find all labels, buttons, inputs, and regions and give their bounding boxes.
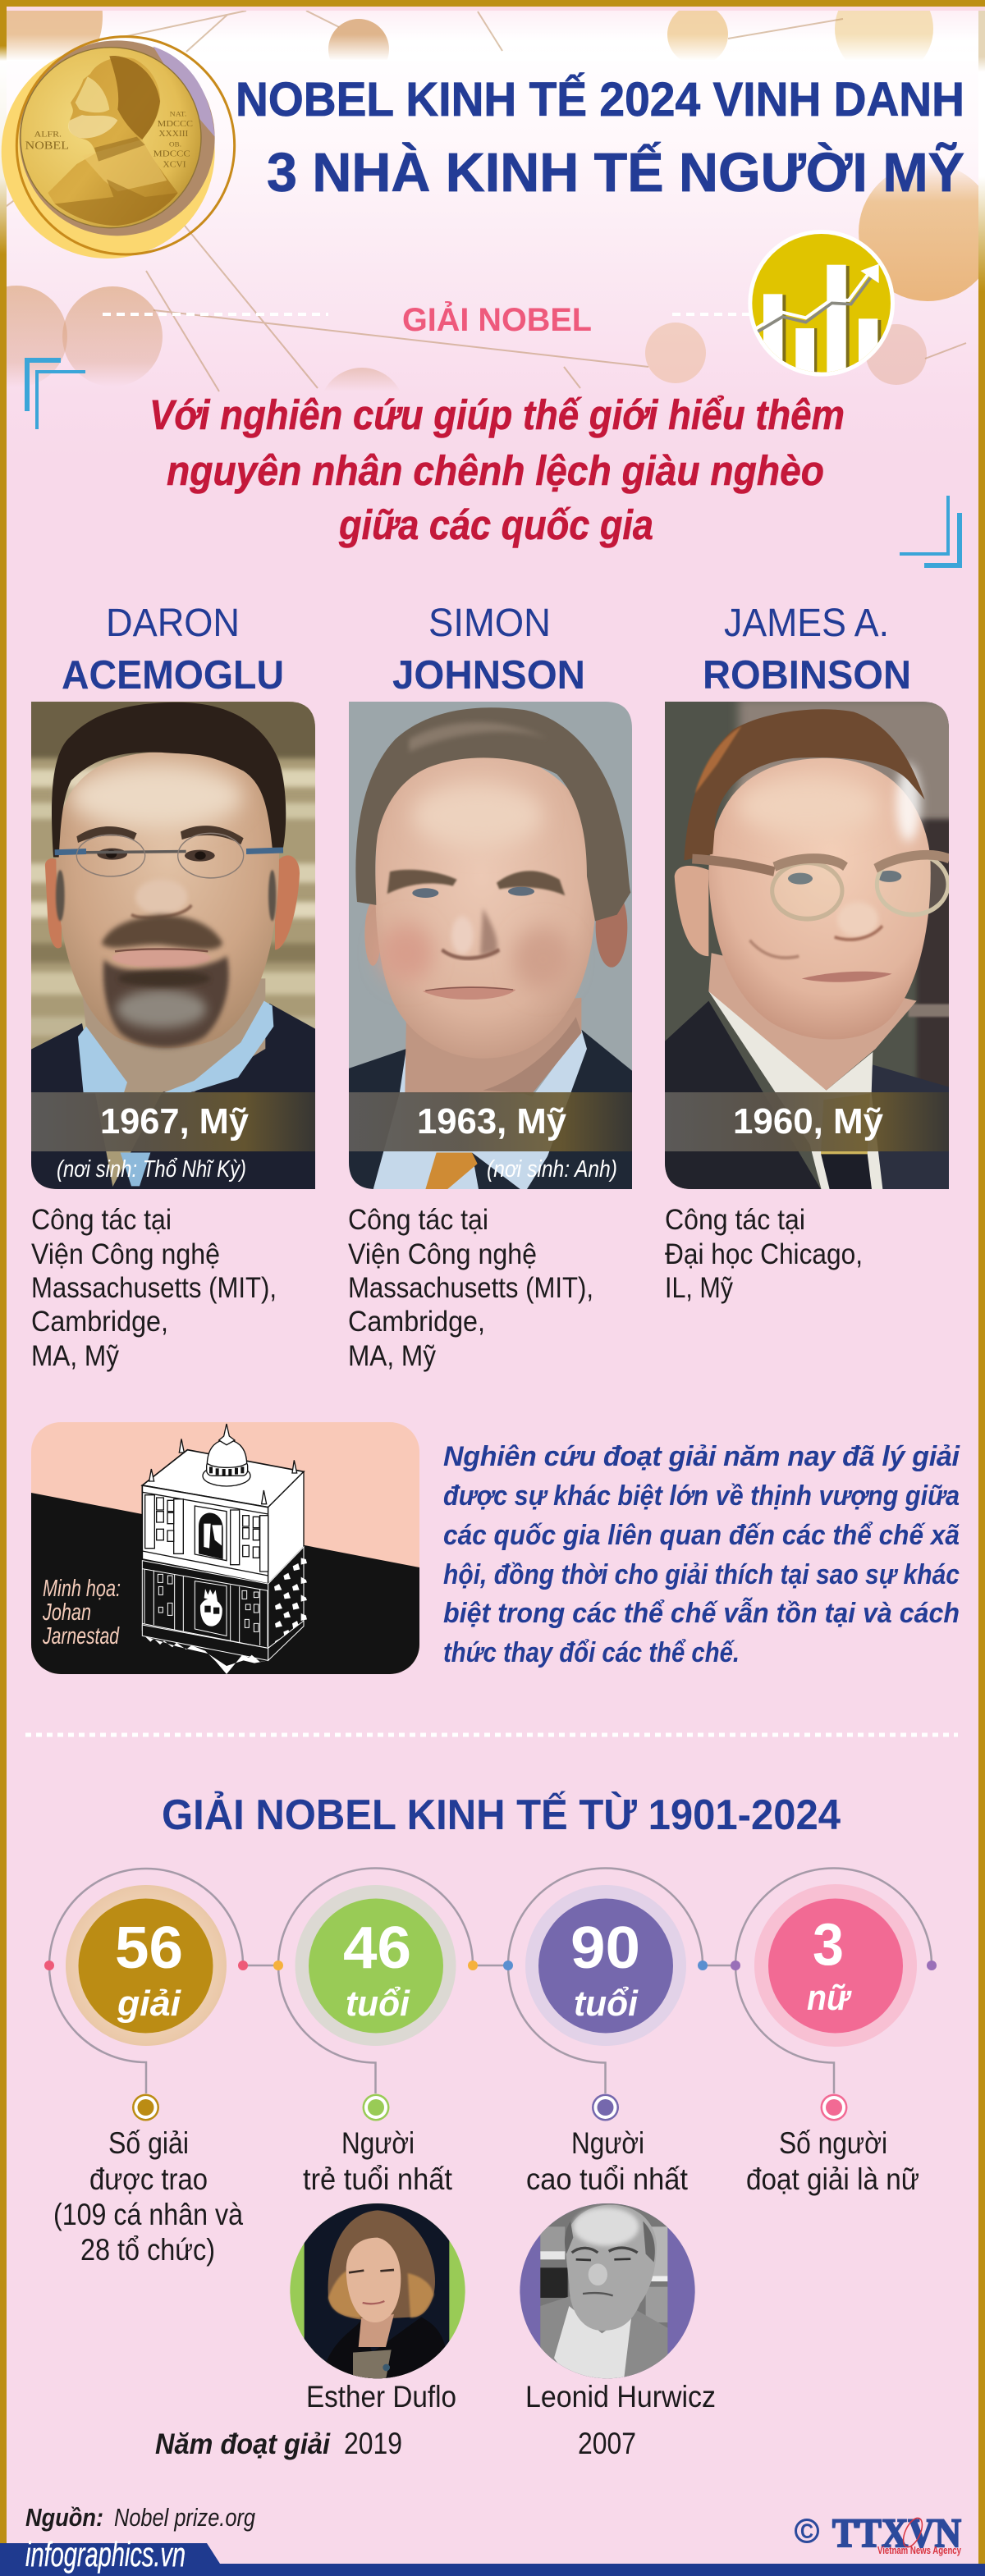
laureate names [62, 602, 911, 698]
stat: youngest 46: 46 [343, 1915, 411, 1981]
title [236, 73, 964, 204]
decorative bracket top left [27, 360, 85, 429]
laureate names and award years [155, 2380, 716, 2460]
panel: illustration by Johan Jarnestad [31, 1422, 419, 1674]
affiliation: Johnson [348, 1204, 593, 1372]
birth year bands: 1967, Mỹ [100, 1101, 250, 1142]
stat labels: Người [571, 2126, 644, 2160]
connectors between stat circles [243, 1965, 735, 1966]
stat: 3 women: 3 [813, 1912, 844, 1978]
stat: oldest 90: tuổi [574, 1983, 639, 2024]
footer bar: infographics.vn [25, 2535, 186, 2574]
icon: Nobel medal: NAT. [170, 110, 186, 118]
stat labels: Số người [779, 2126, 887, 2160]
stat labels: cao tuổi nhất [526, 2162, 689, 2196]
stat: youngest 46 [273, 1868, 478, 2121]
stat: oldest 90: 90 [570, 1915, 640, 1981]
source: Nguồn: [25, 2503, 103, 2532]
stat: youngest 46: tuổi [346, 1983, 410, 2024]
subtitle: nguyên nhân chênh lệch giàu nghèo [167, 447, 824, 494]
stat labels: Số giải [108, 2126, 189, 2160]
stat: 56 prizes: 56 [115, 1915, 183, 1981]
text block: research summary: thức thay đổi các thể chế. [443, 1637, 740, 1668]
source [25, 2503, 255, 2532]
affiliation: Robinson: IL, Mỹ [665, 1272, 733, 1304]
decorative bracket bottom right [900, 496, 960, 565]
illustration credit [43, 1579, 120, 1645]
icon: Nobel medal: NOBEL [25, 140, 69, 153]
stat: 3 women: nữ [807, 1978, 852, 2018]
portrait: Leonid Hurwicz [520, 2202, 695, 2380]
laureate names: DARON [106, 602, 240, 645]
illustration credit: Jarnestad [42, 1623, 120, 1649]
birth year bands: (nơi sinh: Thổ Nhĩ Kỳ) [57, 1156, 246, 1183]
source: Nobel prize.org [114, 2503, 255, 2532]
text block: research summary [443, 1441, 961, 1668]
stat: 3 women [731, 1868, 937, 2121]
affiliation: Acemoglu: Cambridge, [31, 1306, 168, 1338]
icon: Nobel medal [2, 37, 235, 259]
decorative gold circles and lines [7, 11, 978, 392]
affiliation: Johnson: Massachusetts (MIT), [348, 1272, 593, 1304]
affiliation: Johnson: Công tác tại [348, 1204, 488, 1236]
portrait: James A. Robinson [657, 698, 960, 1198]
portrait: Esther Duflo [290, 2202, 465, 2382]
laureate names and award years: Esther Duflo [306, 2380, 456, 2414]
title: 3 NHÀ KINH TẾ NGƯỜI MỸ [267, 142, 964, 204]
stat labels: được trao [89, 2162, 208, 2196]
birth year bands [31, 1092, 949, 1183]
laureate names and award years: 2007 [578, 2427, 636, 2460]
stat labels: (109 cá nhân và [53, 2198, 243, 2231]
icon: Nobel medal: XCVI [163, 160, 186, 169]
affiliation: Acemoglu: Công tác tại [31, 1204, 172, 1236]
icon: Nobel medal: XXXIII [158, 130, 188, 139]
affiliation: Acemoglu: Viện Công nghệ [31, 1238, 220, 1270]
stat labels: 28 tổ chức) [80, 2233, 215, 2267]
affiliation: Acemoglu: MA, Mỹ [31, 1340, 119, 1372]
text block: research summary: Nghiên cứu đoạt giải năm nay đã lý giải [443, 1441, 961, 1472]
subtitle: Với nghiên cứu giúp thế giới hiểu thêm [149, 391, 845, 438]
icon: Nobel medal: MDCCC [158, 120, 193, 129]
affiliation: Robinson [665, 1204, 863, 1304]
stat labels: đoạt giải là nữ [746, 2162, 919, 2196]
affiliation: Robinson: Đại học Chicago, [665, 1238, 863, 1270]
title: NOBEL KINH TẾ 2024 VINH DANH [236, 73, 964, 126]
text block: research summary: các quốc gia liên quan đến các thể chế xã [443, 1520, 960, 1551]
illustration credit: Johan [42, 1599, 91, 1626]
birth year bands: 1963, Mỹ [417, 1101, 567, 1142]
laureate names: SIMON [428, 602, 551, 645]
affiliation: Johnson: Viện Công nghệ [348, 1238, 537, 1270]
section label: Giải Nobel: GIẢI NOBEL [402, 300, 592, 338]
logo: TTXVN: TTXVN [832, 2510, 961, 2555]
birth year bands: (nơi sinh: Anh) [487, 1156, 617, 1183]
stat: 56 prizes [44, 1869, 248, 2121]
laureate names and award years: 2019 [344, 2427, 402, 2460]
subtitle: giữa các quốc gia [338, 501, 653, 548]
heading: Nobel economics 1901-2024: GIẢI NOBEL KINH TẾ TỪ 1901-2024 [162, 1791, 841, 1839]
icon: rising bar chart [748, 230, 895, 384]
subtitle [149, 391, 845, 548]
laureate names: JOHNSON [392, 653, 585, 698]
stat: oldest 90 [503, 1868, 708, 2121]
affiliation: Johnson: Cambridge, [348, 1306, 485, 1338]
laureate names and award years: Năm đoạt giải [155, 2428, 331, 2460]
stat labels: Người [341, 2126, 415, 2160]
laureate names: ROBINSON [703, 653, 911, 698]
footer bar [0, 2535, 985, 2576]
laureate names and award years: Leonid Hurwicz [525, 2380, 716, 2414]
stat labels [53, 2126, 919, 2267]
icon: Nobel medal: MDCCC [153, 150, 190, 159]
laureate names: ACEMOGLU [62, 653, 284, 698]
text block: research summary: biệt trong các thể chế vẫn tồn tại và cách [443, 1598, 960, 1629]
illustration: building and mirrored reflection [142, 1424, 307, 1674]
birth year bands: 1960, Mỹ [733, 1101, 884, 1142]
laureate names: JAMES A. [724, 602, 889, 645]
icon: Nobel medal: OB. [169, 140, 181, 148]
affiliation: Robinson: Công tác tại [665, 1204, 805, 1236]
icon: Nobel medal: ALFR. [34, 131, 62, 140]
stat labels: trẻ tuổi nhất [303, 2162, 453, 2196]
affiliation: Johnson: MA, Mỹ [348, 1340, 436, 1372]
affiliation: Acemoglu [31, 1204, 277, 1372]
portrait: Simon Johnson [341, 698, 644, 1198]
portrait: Daron Acemoglu [25, 698, 328, 1198]
illustration credit: Minh họa: [43, 1576, 121, 1602]
affiliation: Acemoglu: Massachusetts (MIT), [31, 1272, 277, 1304]
logo: TTXVN: C [800, 2520, 813, 2543]
stat: 56 prizes: giải [117, 1983, 181, 2024]
